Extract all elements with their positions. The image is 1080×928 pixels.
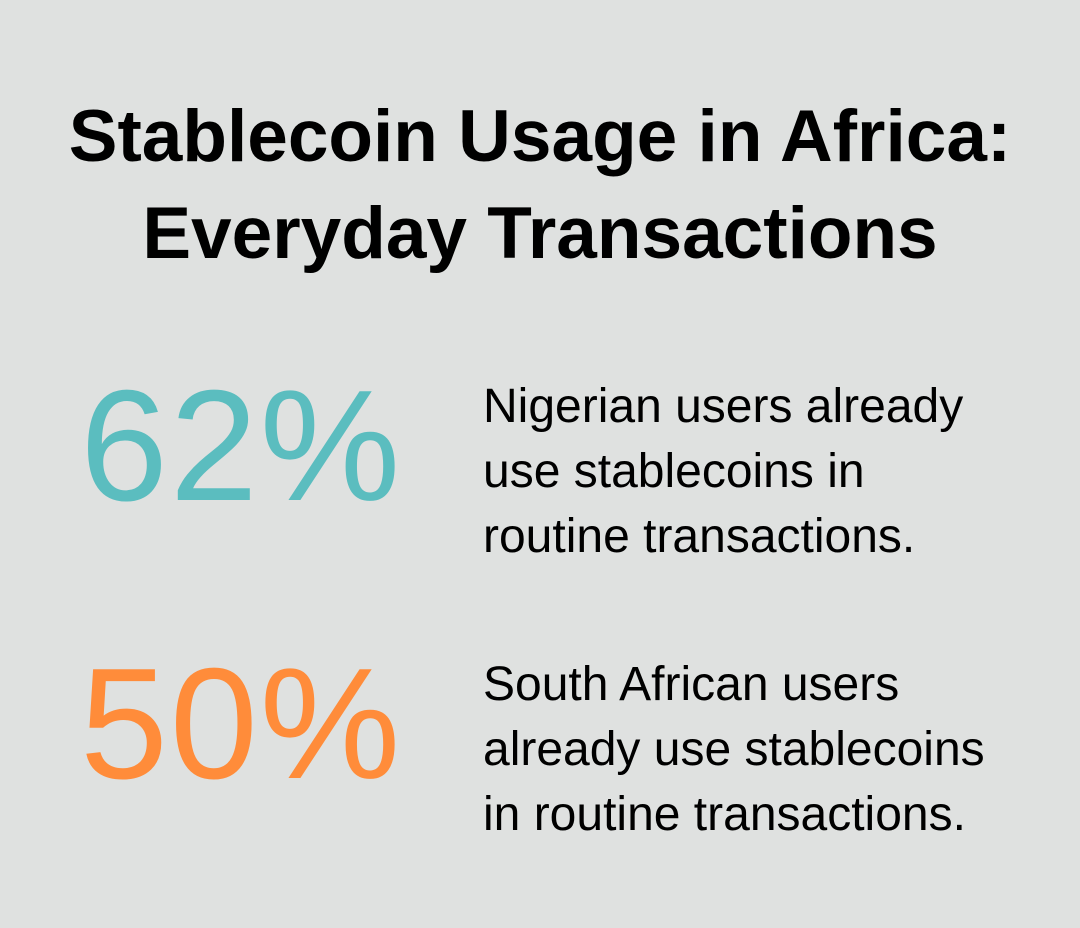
text: South African users	[483, 658, 985, 841]
stat: 50%: 50%	[80, 636, 402, 812]
text: South African users: South African users	[483, 658, 899, 711]
text: Nigerian users: use stablecoins in	[483, 445, 865, 498]
text: South African users: in routine transactions.	[483, 788, 966, 841]
text: Nigerian users	[483, 380, 964, 563]
text: South African users: already use stablecoins	[483, 723, 985, 776]
text: Nigerian users: Nigerian users already	[483, 380, 963, 433]
text: Nigerian users: routine transactions.	[483, 510, 915, 563]
title: Everyday Transactions	[142, 193, 938, 274]
stat: 62%: 62%	[80, 358, 402, 534]
title: Stablecoin Usage in Africa:	[69, 96, 1011, 177]
title	[69, 96, 1011, 274]
